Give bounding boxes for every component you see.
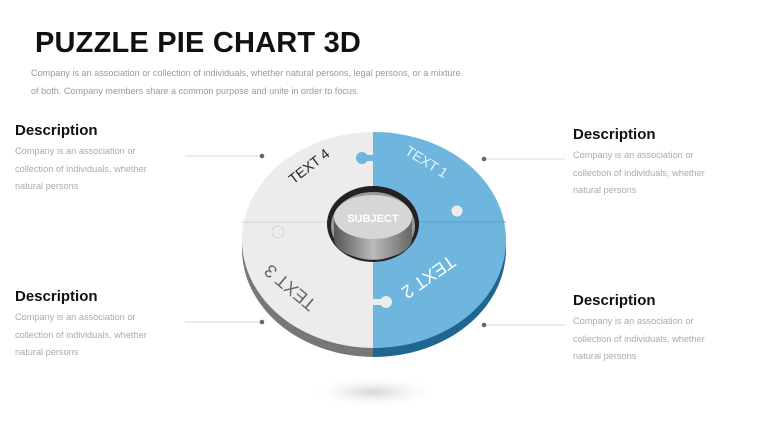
description: top right: Description (573, 126, 656, 143)
description: top left (15, 122, 147, 191)
description: top left: Description (15, 122, 98, 139)
tabs (356, 152, 368, 164)
subtitle: Company is an association or collection of individuals, whether natural persons, legal persons, or a mixture (31, 68, 461, 78)
description: bottom right (573, 292, 705, 361)
description: bottom right: Description (573, 292, 656, 309)
subtitle (31, 68, 461, 96)
labels: TEXT 4 (285, 145, 333, 187)
hole (327, 186, 419, 262)
subject cylinder: SUBJECT (347, 213, 399, 225)
title: PUZZLE PIE CHART 3D (35, 27, 361, 59)
description: bottom left: Company is an association or collection of individuals, whether natural persons (15, 312, 147, 357)
subject cylinder (334, 195, 412, 259)
puzzle pie chart: TEXT 2 (398, 251, 459, 303)
description: top right: Company is an association or collection of individuals, whether natural persons (573, 150, 705, 195)
description: bottom right: Company is an association or collection of individuals, whether natural persons (573, 316, 705, 361)
description: top right (573, 126, 705, 195)
disc face (242, 132, 506, 348)
description: bottom left (15, 288, 147, 357)
description: bottom left: Description (15, 288, 98, 305)
subtitle: of both. Company members share a common purpose and unite in order to focus. (31, 86, 359, 96)
disc side (242, 242, 506, 357)
puzzle pie chart: TEXT 1 (402, 142, 451, 181)
shadow (309, 376, 439, 408)
puzzle pie chart: TEXT 3 (260, 260, 320, 315)
connectors (185, 156, 565, 325)
description: top left: Company is an association or collection of individuals, whether natural persons (15, 146, 147, 191)
puzzle pie chart (185, 132, 565, 401)
